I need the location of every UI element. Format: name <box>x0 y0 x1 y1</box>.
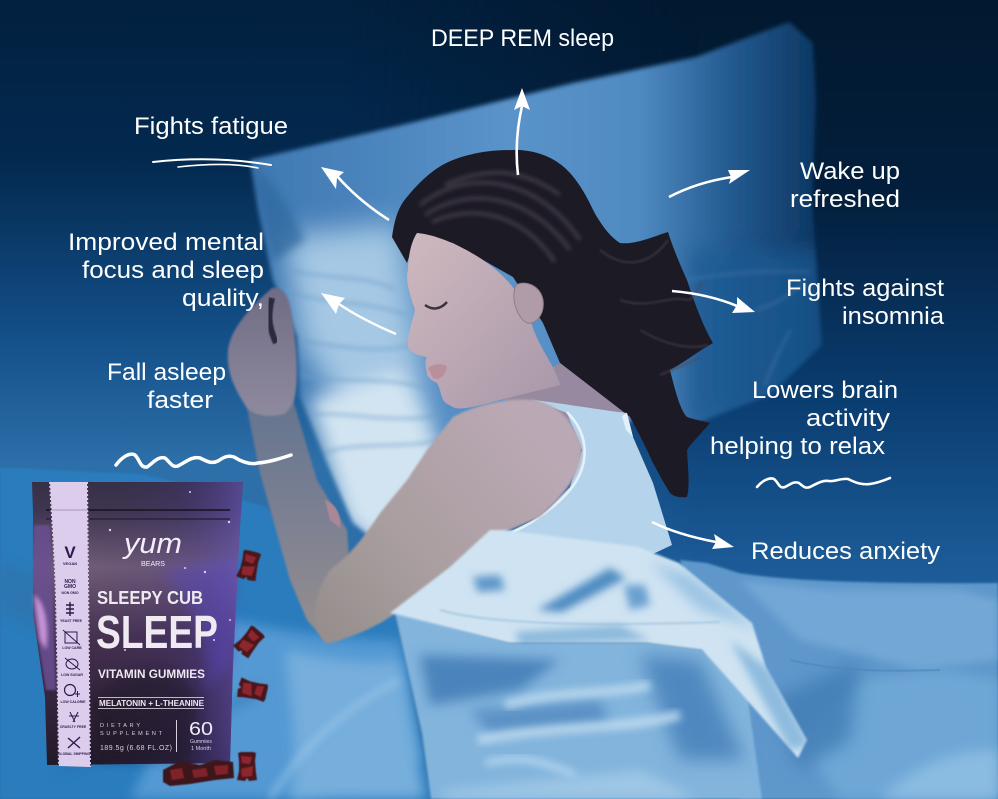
gummy bear pile <box>163 760 234 786</box>
label: Wake up refreshed: Wake up <box>800 158 900 185</box>
pouch side stripe: NON GMO <box>61 591 79 595</box>
gummy bear 2 <box>232 624 266 659</box>
arrow: to Reduces anxiety <box>652 522 734 549</box>
label: Wake up refreshed <box>790 158 900 213</box>
label: Lowers brain activity helping to relax <box>710 377 898 460</box>
gummy bear 1 <box>236 549 262 582</box>
label: Fights against insomnia: Fights against <box>786 275 944 302</box>
pouch side stripe: CRUELTY FREE <box>60 725 87 729</box>
pouch side stripe: V <box>64 543 76 562</box>
arrow: to Wake up refreshed <box>669 170 750 197</box>
pouch side stripe: GLOBAL SHIPPING <box>58 752 90 756</box>
pouch details: 189.5g (6.68 FL.OZ) <box>100 745 172 752</box>
pouch details: 1 Month <box>191 746 211 752</box>
pouch side stripe: NON <box>64 579 76 585</box>
hair <box>392 150 713 497</box>
pouch details <box>100 719 213 752</box>
arrow: to DEEP REM sleep <box>514 88 530 175</box>
arrow: to Improved mental focus <box>321 293 396 334</box>
blanket: bright top fold <box>390 528 808 759</box>
label: Lowers brain activity helping to relax: activity <box>806 405 890 432</box>
label: Lowers brain activity helping to relax: helping to relax <box>710 433 885 460</box>
neck and face <box>407 233 630 425</box>
label: Fights against insomnia: insomnia <box>842 303 945 330</box>
pouch title: VITAMIN GUMMIES <box>98 667 205 681</box>
blanket: left sheet <box>0 468 431 799</box>
pouch side stripe: LOW SUGAR <box>61 673 83 677</box>
gummy bears <box>163 549 269 786</box>
gummy bear 4 <box>237 752 257 781</box>
pouch title: SLEEP <box>96 606 218 658</box>
pouch title: MELATONIN + L-THEANINE <box>99 698 204 708</box>
label: Fall asleep faster: faster <box>147 387 213 414</box>
arrow: to Fights against insomnia <box>672 291 755 313</box>
pouch details: DIETARY <box>100 723 140 729</box>
pouch side stripe: LOW CALORIE <box>61 700 86 704</box>
label: Fall asleep faster: Fall asleep <box>107 359 226 386</box>
label: Improved mental focus and sleep quality: focus and sleep <box>82 257 264 284</box>
pouch side stripe: GMO <box>64 584 76 590</box>
pouch body <box>32 482 243 765</box>
label: Improved mental focus and sleep quality: Improved mental <box>68 229 264 256</box>
forearm <box>247 400 350 643</box>
hand <box>228 288 340 528</box>
pouch side stripe <box>50 482 90 767</box>
upper arm and shoulder <box>315 400 582 643</box>
pouch details: 60 <box>189 719 213 739</box>
pouch logo: yum <box>122 528 182 560</box>
pouch side stripe: VEGAN <box>63 561 77 566</box>
underline: fights fatigue <box>153 159 271 168</box>
label: Fights against insomnia <box>786 275 945 330</box>
label: Lowers brain activity helping to relax: Lowers brain <box>752 377 898 404</box>
arrow: to Fights fatigue <box>321 167 389 220</box>
pouch details: Gummies <box>190 739 212 745</box>
blanket: right sheet <box>680 560 998 799</box>
gummy bear 3 <box>236 677 269 703</box>
label: Reduces anxiety: Reduces anxiety <box>751 538 940 565</box>
pouch logo: BEARS <box>141 559 165 568</box>
label: Improved mental focus and sleep quality <box>68 229 264 312</box>
blanket: lower duvet <box>395 613 762 799</box>
pouch details: SUPPLEMENT <box>100 731 163 737</box>
pouch side stripe: YEAST FREE <box>60 619 83 623</box>
squiggle: fall asleep <box>116 454 291 467</box>
squiggle: lowers brain activity <box>757 478 890 488</box>
label: Improved mental focus and sleep quality: quality, <box>182 285 264 312</box>
pouch side stripe: LOW CARB <box>62 646 82 650</box>
tank top <box>480 400 672 560</box>
pouch title <box>96 588 218 708</box>
label: DEEP REM sleep: DEEP REM sleep <box>431 25 614 52</box>
product pouch <box>32 482 243 767</box>
pillow <box>248 20 823 535</box>
pouch title: SLEEPY CUB <box>97 588 203 608</box>
label: Wake up refreshed: refreshed <box>790 186 900 213</box>
label: Fall asleep faster <box>107 359 226 414</box>
label: Fights fatigue: Fights fatigue <box>134 113 288 140</box>
